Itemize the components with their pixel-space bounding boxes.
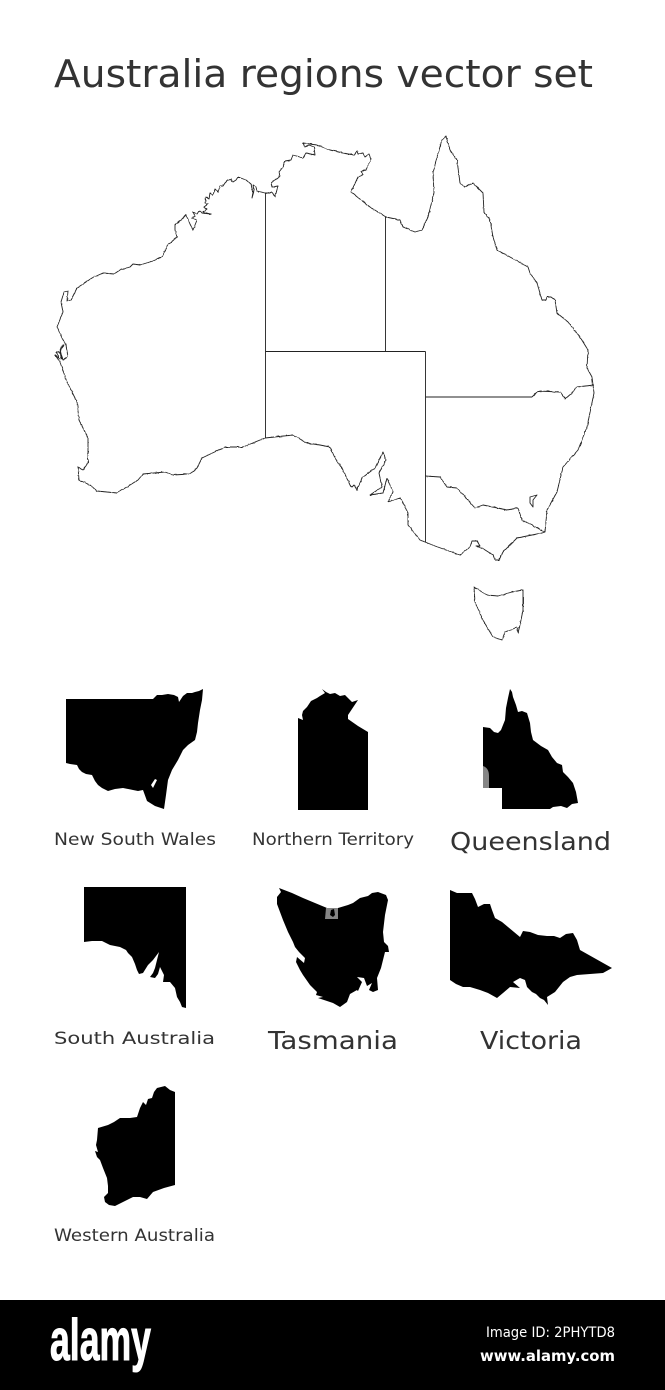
map: Australia outline with state borders — [55, 136, 594, 640]
mainland coastline — [55, 136, 594, 560]
website: www.alamy.com — [480, 1347, 615, 1365]
Queensland shape — [483, 689, 578, 809]
South Australia label: South Australia — [54, 1029, 215, 1049]
state borders — [266, 193, 532, 542]
New South Wales label: New South Wales — [54, 830, 216, 850]
grey artifact — [325, 908, 338, 919]
Victoria shape — [450, 890, 612, 1005]
image id: Image ID: 2PHYTD8 — [486, 1325, 615, 1341]
footer bar — [0, 1300, 665, 1390]
Northern Territory shape — [298, 689, 368, 810]
New South Wales shape — [66, 689, 203, 809]
Victoria label: Victoria — [480, 1026, 582, 1055]
ACT outline — [530, 495, 537, 507]
Tasmania label: Tasmania — [267, 1026, 398, 1055]
South Australia shape — [84, 887, 186, 1008]
NSW border curves — [425, 385, 594, 532]
Queensland label: Queensland — [450, 827, 611, 856]
alamy logo: alamy — [50, 1308, 151, 1373]
Northern Territory label: Northern Territory — [252, 830, 414, 850]
grey artifact — [483, 766, 489, 788]
Western Australia shape — [95, 1086, 175, 1206]
Tasmania shape — [277, 888, 389, 1007]
title: Australia regions vector set — [54, 52, 593, 96]
Tasmania outline — [474, 587, 523, 640]
Western Australia label: Western Australia — [54, 1226, 215, 1246]
